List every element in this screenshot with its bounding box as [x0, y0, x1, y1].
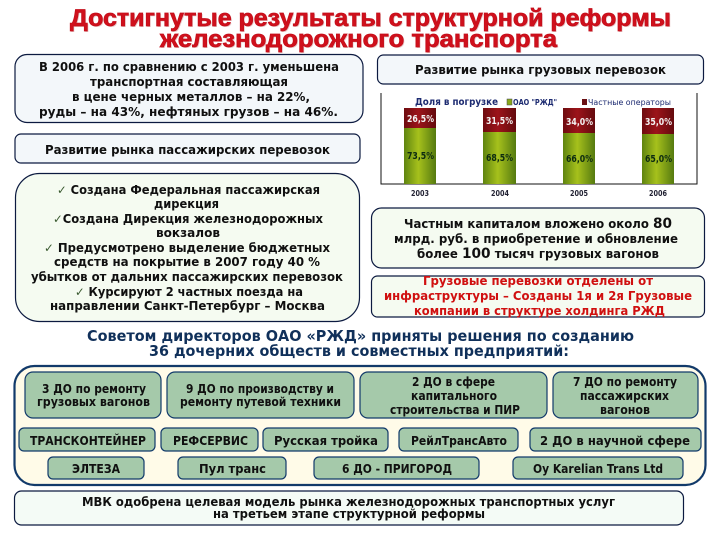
heading: board decisions: 36 дочерних обществ и совместных предприятий: — [149, 342, 569, 360]
heading: passenger transport market — [15, 134, 360, 163]
heading: freight transport market: Развитие рынка грузовых перевозок — [415, 63, 666, 77]
block: 7 subsidiaries: пассажирских — [580, 389, 669, 403]
block: 2 subsidiaries science: 2 ДО в научной сфере — [540, 434, 690, 448]
block: Transcontainer — [19, 428, 155, 451]
bar 2004: 2004 — [491, 189, 509, 198]
title: Достигнутые результаты структурной реформы — [70, 5, 671, 32]
block: Transcontainer: ТРАНСКОНТЕЙНЕР — [30, 433, 146, 448]
block: Refservis — [161, 428, 258, 451]
chart legend: Частные операторы — [588, 98, 671, 107]
panel: passenger measures: дирекция — [154, 197, 219, 211]
bar 2005 — [563, 108, 595, 198]
block: 6 subsidiaries suburban — [314, 457, 479, 479]
block: 3 subsidiaries: 3 ДО по ремонту — [42, 382, 146, 396]
bar 2006: 2006 — [649, 189, 667, 198]
heading: board decisions: Советом директоров ОАО «РЖД» приняты решения по созданию — [87, 327, 634, 345]
chart legend: ОАО "РЖД" — [513, 98, 557, 107]
bar 2003: 26,5% — [407, 114, 434, 125]
bar 2005: 66,0% — [566, 154, 593, 165]
block: Oy Karelian Trans: Oy Karelian Trans Ltd — [533, 462, 663, 476]
bar 2006: 65,0% — [645, 154, 672, 165]
bar 2005: 2005 — [570, 189, 588, 198]
panel: transport cost reduction: транспортная составляющая — [90, 75, 288, 89]
block: Refservis: РЕФСЕРВИС — [173, 434, 248, 448]
stacked bar chart: share of loading — [381, 93, 697, 198]
callout: private capital: более 100 тысяч грузовых вагонов — [417, 246, 659, 262]
callout: freight separated from infrastructure: компании в структуре холдинга РЖД — [414, 304, 665, 318]
title: Достигнутые результаты структурной реформы — [71, 6, 672, 33]
callout: target model: МВК одобрена целевая модель рынка железнодорожных транспортных услуг — [82, 495, 615, 509]
block: 3 subsidiaries — [25, 372, 161, 418]
callout: freight separated from infrastructure: инфраструктуры – Созданы 1я и 2я Грузовые — [384, 289, 692, 303]
chart legend — [415, 97, 671, 108]
panel: passenger measures: ✓ Курсируют 2 частных поезда на — [75, 285, 303, 299]
bar 2006 — [642, 108, 674, 198]
block: 2 subsidiaries construction: капитального — [411, 389, 497, 403]
title: железнодорожного транспорта — [159, 26, 558, 53]
callout: target model: на третьем этапе структурной реформы — [213, 507, 485, 521]
bar 2003 — [404, 108, 436, 198]
block: 7 subsidiaries: 7 ДО по ремонту — [573, 375, 677, 389]
chart legend: Доля в погрузке — [415, 97, 498, 108]
block: 3 subsidiaries: грузовых вагонов — [37, 395, 150, 409]
block: Pul trans: Пул транс — [199, 462, 266, 476]
block: 2 subsidiaries science — [530, 428, 701, 451]
panel: passenger measures: направлении Санкт-Петербург – Москва — [50, 299, 325, 313]
block: RailTransAuto: РейлТрансАвто — [411, 434, 507, 448]
panel: passenger measures: вокзалов — [156, 226, 220, 240]
bar 2005: 34,0% — [566, 117, 593, 128]
block: 9 subsidiaries: 9 ДО по производству и — [186, 382, 334, 396]
block: Elteza — [48, 457, 144, 479]
block: 7 subsidiaries: вагонов — [600, 403, 650, 417]
block: Russkaya troika: Русская тройка — [274, 434, 378, 448]
block: Elteza: ЭЛТЕЗА — [72, 462, 121, 476]
panel: transport cost reduction — [15, 54, 363, 122]
block: Russkaya troika — [263, 428, 388, 451]
panel: passenger measures: средств на покрытие в 2007 году 40 % — [54, 255, 320, 269]
panel: subsidiaries — [14, 366, 706, 485]
panel: transport cost reduction: в цене черных металлов – на 22%, — [72, 90, 310, 104]
block: 7 subsidiaries — [553, 372, 698, 418]
bar 2003: 73,5% — [407, 151, 434, 162]
panel: passenger measures: ✓ Создана Федеральная пассажирская — [57, 183, 320, 197]
block: RailTransAuto — [399, 428, 518, 451]
callout: freight separated from infrastructure — [372, 274, 704, 318]
title: железнодорожного транспорта — [160, 27, 559, 54]
block: 6 subsidiaries suburban: 6 ДО - ПРИГОРОД — [342, 462, 452, 476]
heading: passenger transport market: Развитие рынка пассажирских перевозок — [45, 143, 330, 157]
bar 2004 — [483, 108, 516, 198]
panel: passenger measures: ✓Создана Дирекция железнодорожных — [53, 212, 323, 226]
callout: target model — [14, 491, 684, 525]
block: 2 subsidiaries construction: 2 ДО в сфере — [412, 375, 495, 389]
bar 2004: 68,5% — [486, 153, 513, 164]
block: Pul trans — [178, 457, 286, 479]
panel: passenger measures: убытков от дальних пассажирских перевозок — [31, 270, 343, 284]
heading: board decisions — [87, 327, 634, 360]
panel: transport cost reduction: В 2006 г. по сравнению с 2003 г. уменьшена — [39, 60, 339, 74]
block: 2 subsidiaries construction — [360, 372, 547, 418]
bar 2006: 35,0% — [645, 117, 672, 128]
heading: freight transport market — [378, 55, 704, 84]
callout: private capital: Частным капиталом вложено около 80 — [404, 216, 672, 232]
block: 2 subsidiaries construction: строительства и ПИР — [390, 403, 520, 417]
callout: freight separated from infrastructure: Грузовые перевозки отделены от — [423, 274, 653, 288]
bar 2003: 2003 — [411, 189, 429, 198]
callout: private capital: млрд. руб. в приобретение и обновление — [394, 232, 678, 246]
panel: passenger measures — [16, 174, 360, 322]
panel: transport cost reduction: руды – на 43%, нефтяных грузов – на 46%. — [39, 105, 338, 119]
panel: passenger measures: ✓ Предусмотрено выделение бюджетных — [44, 241, 330, 255]
block: 9 subsidiaries: ремонту путевой техники — [180, 395, 341, 409]
title — [70, 5, 672, 54]
callout: private capital — [372, 208, 704, 268]
block: Oy Karelian Trans — [513, 457, 683, 479]
bar 2004: 31,5% — [486, 116, 513, 127]
block: 9 subsidiaries — [167, 372, 354, 418]
